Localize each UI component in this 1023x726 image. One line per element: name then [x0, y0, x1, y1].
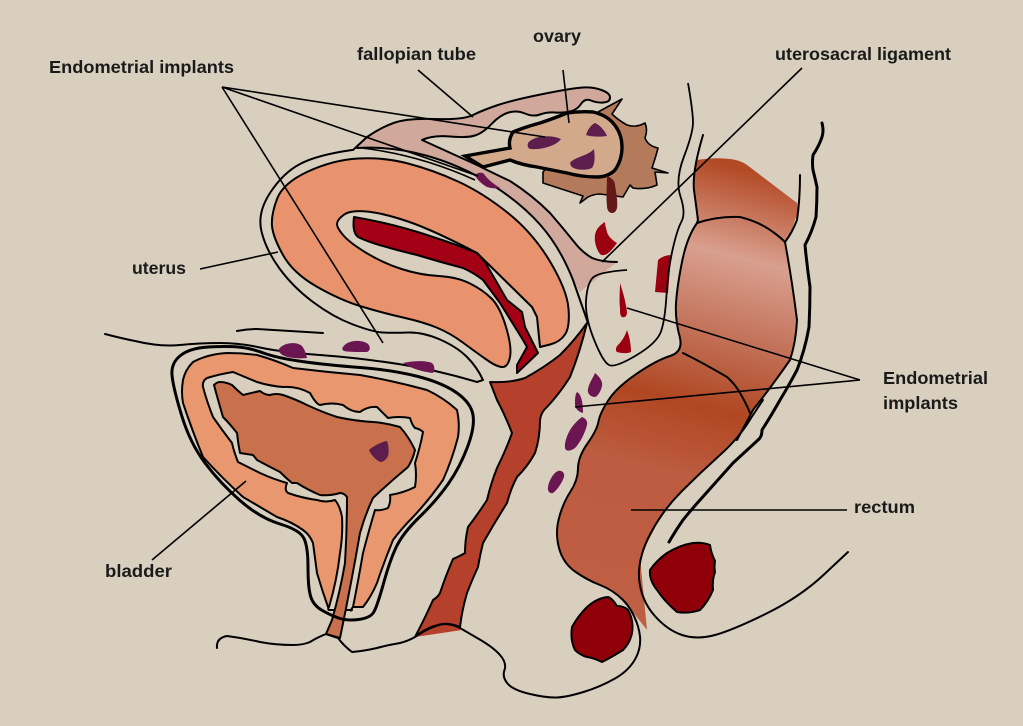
- uterus muscle wall: [272, 158, 569, 367]
- red drop implant 2: [616, 330, 631, 353]
- bladder: [172, 346, 473, 638]
- uterus upper peritoneum line: [357, 148, 588, 323]
- label: endometrial right: Endometrial: [883, 368, 988, 388]
- ovary implant 3: [570, 149, 595, 170]
- leader: implants to pink band: [222, 87, 478, 176]
- rectal mass: [571, 597, 632, 662]
- leader lines: [152, 68, 860, 560]
- upper short peritoneal line: [237, 329, 323, 333]
- label: uterus: uterus: [132, 258, 186, 278]
- red drop implant 1: [620, 283, 627, 317]
- labels: [49, 26, 988, 581]
- bladder cavity and urethra: [214, 382, 415, 638]
- peritoneal implant 3: [403, 361, 434, 373]
- ovary: [465, 112, 622, 177]
- leader: uterus: [200, 252, 278, 269]
- fallopian tube outline: [353, 87, 617, 262]
- column implant 1: [588, 373, 602, 397]
- label: fallopian tube: fallopian tube: [357, 44, 476, 64]
- peritoneal implant 1: [279, 343, 307, 358]
- bladder muscle wall: [182, 353, 459, 607]
- uterus serosa and peritoneum line: [105, 150, 483, 382]
- label: rectum: rectum: [854, 497, 915, 517]
- leader: right implants upper: [627, 308, 860, 380]
- rectum lower section line: [683, 353, 750, 413]
- column implant 3: [565, 417, 587, 451]
- red implant: [595, 222, 617, 255]
- label: ovary: ovary: [533, 26, 581, 46]
- uterosacral ligament fill and fallopian tube: [353, 87, 617, 292]
- rectum anterior line: [737, 175, 800, 440]
- leader: rectum: [631, 509, 847, 511]
- implant on pink band: [475, 173, 500, 188]
- bladder lining: [203, 372, 423, 611]
- leader: implants to peritoneum: [222, 87, 383, 343]
- label: bladder: bladder: [105, 561, 172, 581]
- vagina base sliver: [415, 624, 462, 637]
- uterosacral peritoneal pouch line: [586, 83, 693, 366]
- leader: uterosacral ligament: [602, 68, 802, 262]
- leader: implants to ovary: [222, 87, 545, 137]
- uterine cavity: [354, 217, 538, 373]
- column implant 4: [548, 471, 564, 493]
- ovary body: [465, 112, 622, 177]
- label: implants right: implants: [883, 393, 958, 413]
- peritoneal implant 2: [342, 341, 370, 352]
- anal canal front line: [639, 400, 848, 638]
- rectum: [460, 123, 848, 698]
- uterus: [272, 158, 569, 373]
- perineum line: [217, 624, 460, 652]
- ovary implant 1: [528, 136, 561, 149]
- column implant 2: [575, 392, 583, 413]
- second thin serosa line: [362, 148, 475, 180]
- label: endometrial implants left: Endometrial implants: [49, 57, 234, 77]
- red implant on rectum: [655, 255, 671, 293]
- ovary implant 2: [586, 123, 607, 137]
- leader: fallopian tube: [418, 70, 473, 117]
- rectum section line: [697, 217, 785, 242]
- dark implant below ovary: [607, 176, 617, 213]
- vagina: [415, 323, 587, 637]
- anal sphincter mass: [650, 543, 715, 613]
- leader: bladder: [152, 481, 246, 560]
- rectum back wall thin line: [460, 135, 703, 698]
- label: uterosacral ligament: uterosacral ligament: [775, 44, 951, 64]
- bladder implant: [369, 441, 389, 462]
- ovary back spiky tissue: [543, 99, 668, 203]
- rectum fill: [557, 158, 798, 630]
- leader: right implants lower: [575, 380, 860, 407]
- bladder outer wall: [172, 346, 473, 620]
- outer thick posterior line: [669, 123, 823, 542]
- leader: ovary: [563, 70, 569, 123]
